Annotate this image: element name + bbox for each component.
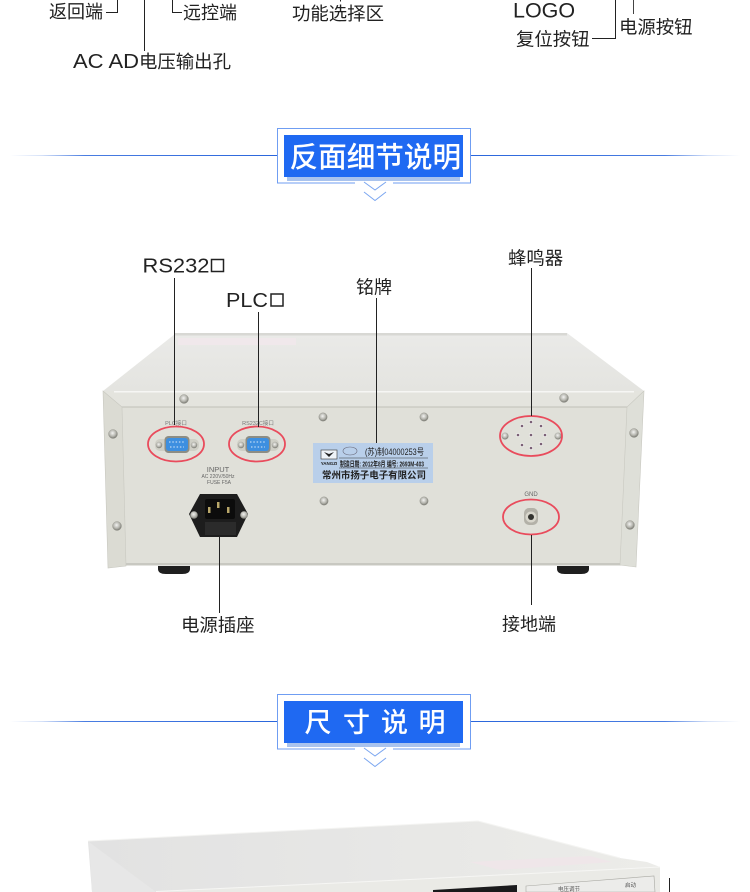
section heading: 尺寸说明: 尺 xyxy=(304,708,332,738)
label: 返回端: 返回端 xyxy=(49,2,103,22)
section heading: 尺寸说明: 说 xyxy=(381,708,408,738)
port: PLC connector: PLC接口 xyxy=(165,419,187,427)
callout: 电源插座: 电源插座 xyxy=(181,614,255,636)
right bracket xyxy=(620,391,644,567)
feet xyxy=(158,566,190,574)
callout: 蜂鸣器: 蜂鸣器 xyxy=(508,248,563,268)
label: 电源按钮 xyxy=(619,0,693,38)
faint stamp xyxy=(178,338,296,345)
callout: 铭牌: 铭牌 xyxy=(356,278,392,298)
nameplate: 制造日期: 2012年8月 编号: 2693M-403 xyxy=(340,458,424,468)
nameplate xyxy=(313,443,433,483)
power socket xyxy=(189,494,248,537)
control panel: 启动 xyxy=(625,881,637,889)
nameplate: (苏)制04000253号 xyxy=(365,446,424,457)
screws xyxy=(108,394,638,530)
product: rear view of instrument xyxy=(103,333,644,574)
label: 功能选择区: 功能选择区 xyxy=(292,3,384,24)
port markings: INPUT xyxy=(201,465,235,486)
icon: double chevron xyxy=(364,182,386,200)
port markings: INPUT: FUSE F5A xyxy=(207,480,232,486)
ground terminal xyxy=(524,492,538,525)
nameplate: 常州市扬子电子有限公司 xyxy=(322,470,426,482)
port: RS232 connector: RS232C接口 xyxy=(242,419,274,427)
section heading: 尺寸说明 xyxy=(10,694,740,766)
label: AC AD电压输出孔: 电压输出孔 xyxy=(139,51,231,72)
callout: 电源插座 xyxy=(181,536,255,636)
faint stamp xyxy=(470,856,612,870)
control panel xyxy=(526,876,655,892)
port: RS232 connector xyxy=(237,419,279,453)
label: AC AD电压输出孔 xyxy=(73,0,231,73)
top surface xyxy=(103,333,644,391)
front panel xyxy=(122,407,627,563)
icon: double chevron xyxy=(364,748,386,766)
label: 复位按钮: 复位按钮 xyxy=(516,28,590,50)
top surface xyxy=(88,821,660,892)
port: PLC connector xyxy=(155,419,199,453)
label: 电源按钮: 电源按钮 xyxy=(619,16,693,38)
top lip strip xyxy=(103,391,644,407)
red highlight rings xyxy=(148,416,562,534)
callout: PLC口: PLC xyxy=(226,289,268,312)
left side xyxy=(89,842,156,892)
label: 复位按钮 xyxy=(516,0,616,50)
product: top front view of instrument xyxy=(88,821,660,892)
front edge xyxy=(156,867,660,892)
callouts: rear view xyxy=(142,248,563,636)
label: AC AD电压输出孔: AC AD xyxy=(73,51,139,73)
callout: PLC口 xyxy=(226,289,283,427)
ground terminal: GND xyxy=(524,492,538,498)
port markings: INPUT: INPUT xyxy=(207,465,230,474)
left bracket xyxy=(103,391,126,568)
section heading: 反面细节说明: 反面细节说明 xyxy=(290,142,461,174)
callout: RS232口 xyxy=(142,254,224,425)
buzzer holes xyxy=(502,420,562,450)
section heading: 反面细节说明 xyxy=(10,128,740,200)
display window xyxy=(433,885,517,892)
label: 远控端: 远控端 xyxy=(183,3,237,23)
callout: 接地端: 接地端 xyxy=(502,614,556,634)
section heading: 尺寸说明: 寸 xyxy=(343,708,370,738)
port markings: INPUT: AC 220V/50Hz xyxy=(201,474,235,480)
nameplate: YANGZI xyxy=(321,461,337,466)
callout line xyxy=(668,878,670,892)
section heading: 尺寸说明: 明 xyxy=(418,708,446,738)
callout: 接地端 xyxy=(502,535,556,634)
top callout labels xyxy=(49,0,693,73)
callout: RS232口: RS232 xyxy=(142,254,210,278)
